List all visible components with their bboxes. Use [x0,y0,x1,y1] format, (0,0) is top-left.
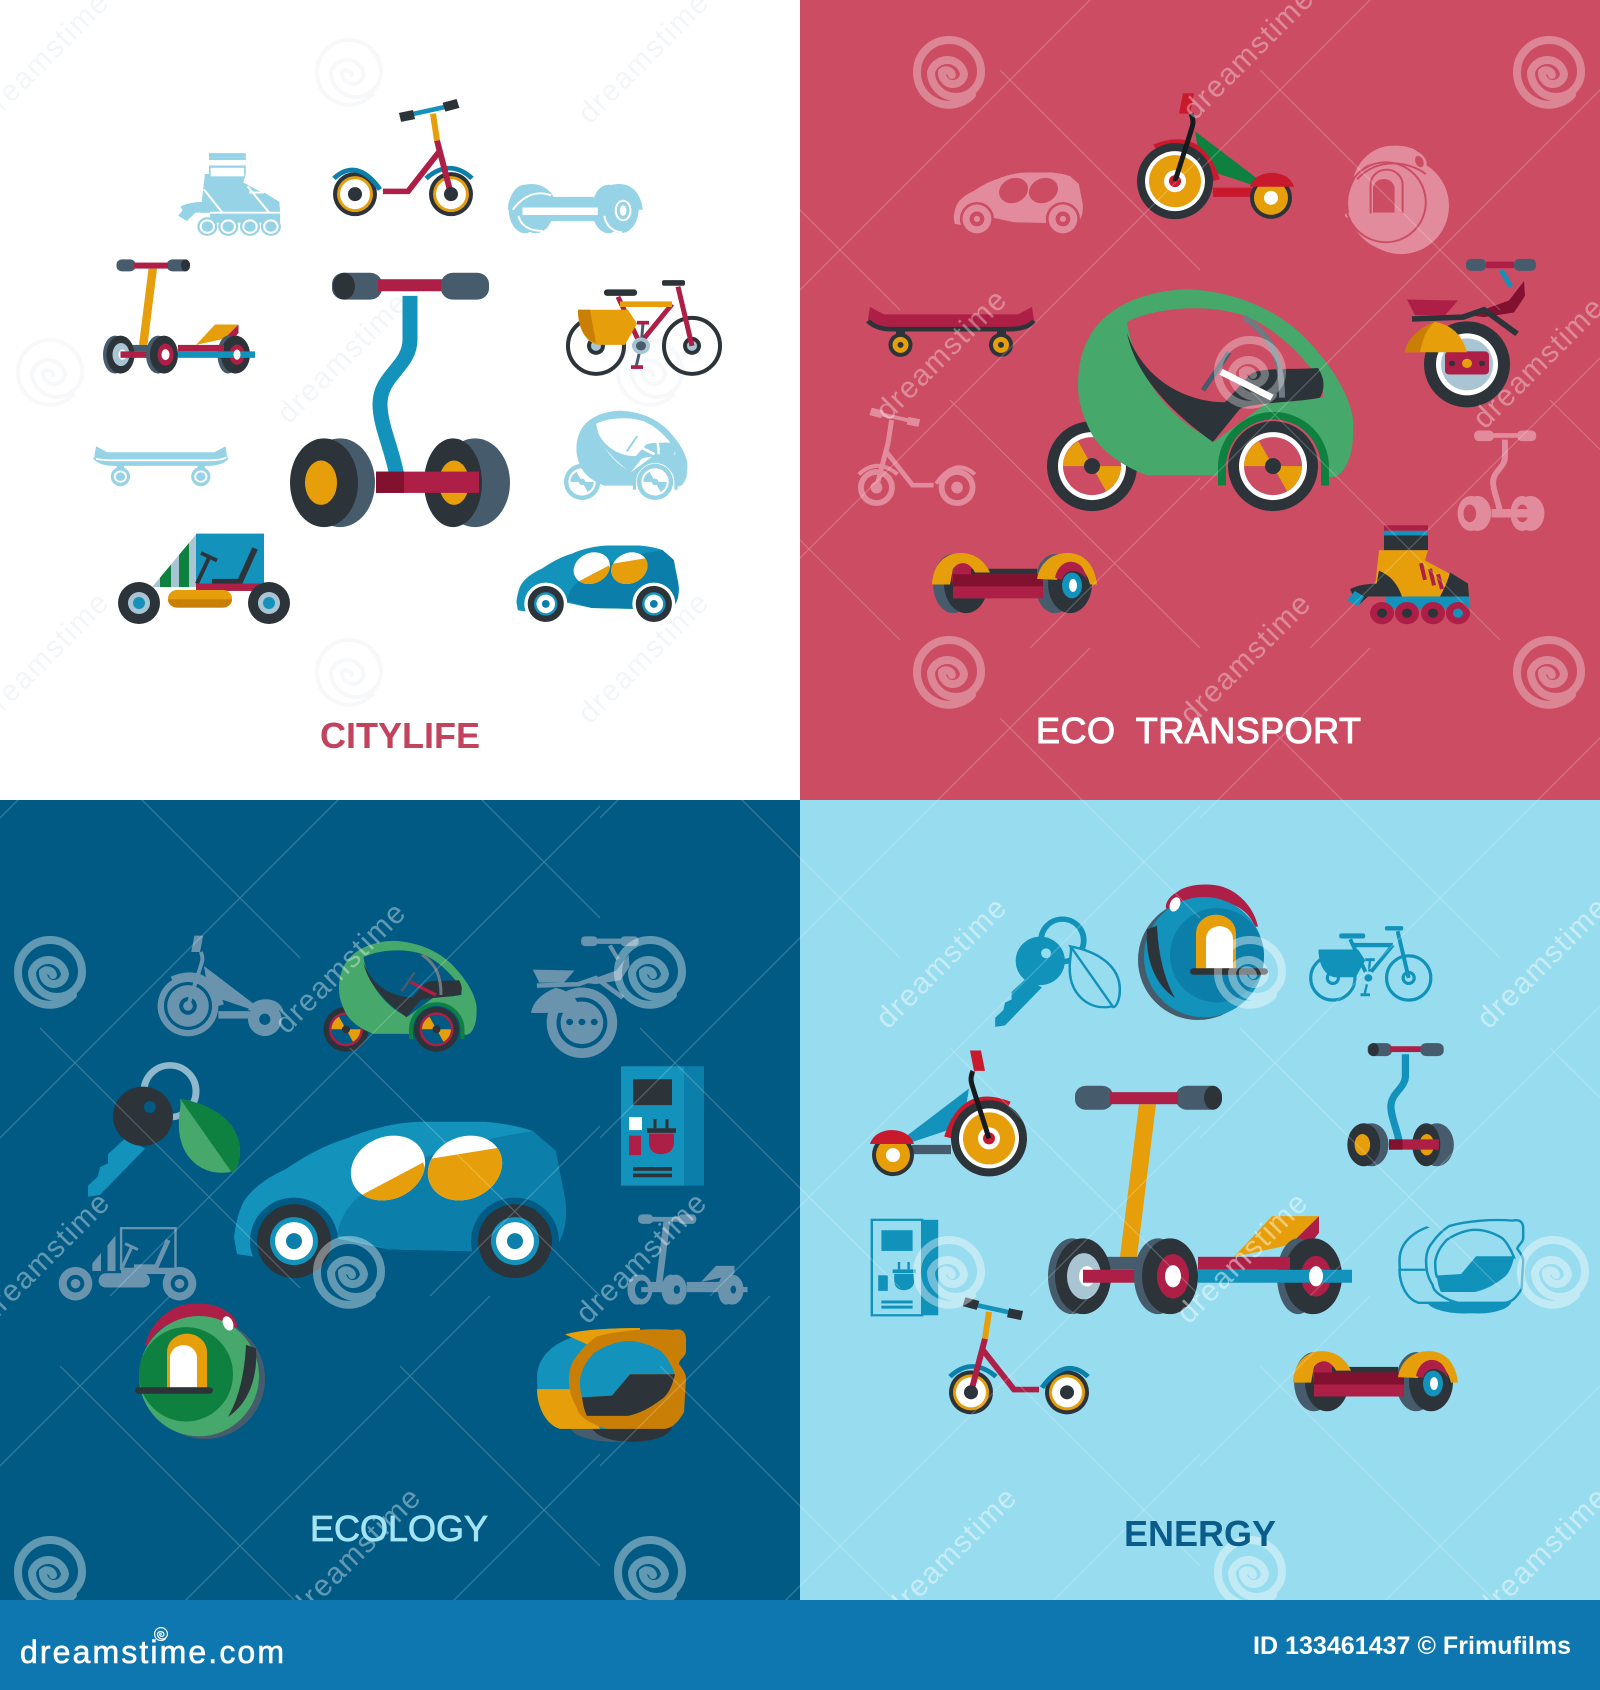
icon group: ecology vehicles [59,936,748,1442]
title: ecology: ECOLOGY [310,1508,488,1549]
watermark: citylife panel [0,0,715,730]
footer credit: ID 133461437 © Frimufilms [1253,1632,1571,1660]
icon: kick scooter [333,103,473,216]
icon: bubble car large [1047,289,1353,516]
icon: charging station [621,1066,704,1186]
panel: energy [800,800,1600,1625]
footer bar [0,1600,1600,1690]
icon: small electric car [516,546,679,625]
watermark: ecology panel [0,800,800,1625]
icon: moto wheel [1405,259,1536,407]
icon: bubble car small [324,941,477,1054]
icon: capsule helmet [537,1328,686,1442]
icon: monowheel blue [1138,884,1268,1020]
icon: moto wheel silhouette [531,936,639,1058]
icon: roller skate outline [178,153,281,236]
panel: ecology [0,800,800,1625]
watermark: ecology panel: dreamstime [570,1187,713,1330]
footer logo: dreamstime.com: dreamstime.com [20,1634,284,1670]
icon: three-wheel scooter large [1048,1086,1352,1314]
watermark: citylife panel: dreamstime [572,587,715,730]
title: citylife: CITYLIFE [320,715,480,756]
title: eco transport: ECO TRANSPORT [1036,710,1361,751]
icon: skateboard outline [94,446,227,486]
icon: capsule outline [1400,1219,1523,1313]
icon: skateboard [868,307,1034,357]
watermark: energy panel: dreamstime [1171,1187,1314,1330]
icon: three-wheel scooter silhouette [627,1214,748,1305]
icon: segway small [1347,1043,1454,1166]
icon: segway large [290,273,510,527]
icon: bubble car outline [564,411,687,502]
icon: electric car large [234,1122,566,1285]
watermark: citylife panel: dreamstime [271,287,414,430]
panel: eco transport [800,0,1600,800]
watermark: energy panel [800,800,1600,1625]
panel: citylife [0,0,722,748]
icon: go-cart silhouette [59,1227,196,1300]
icon: monowheel green [135,1304,265,1439]
watermark: eco transport panel: dreamstime [1174,588,1317,731]
icon: tricycle silhouette [158,936,283,1036]
title: energy: ENERGY [1124,1513,1276,1554]
watermark: energy panel: dreamstime [870,892,1013,1035]
icon: segway silhouette [1458,431,1544,531]
icon: cargo bicycle [568,280,720,374]
icon: key outline [995,919,1120,1027]
watermark: ecology panel: dreamstime [284,1482,427,1625]
icon group: eco transport vehicles [858,93,1544,624]
icon: hoverboard outline [508,184,643,233]
icon: kick scooter silhouette [858,411,976,506]
icon: three-wheel scooter [103,259,255,374]
icon: tricycle [1137,93,1294,219]
icon: tricycle blue [870,1051,1027,1176]
watermark: eco transport panel: dreamstime [870,284,1013,427]
icon: hoverboard [1293,1351,1458,1411]
icon: key with leaf [88,1065,240,1197]
watermark: energy panel: dreamstime [880,1482,1023,1625]
icon group: energy vehicles [870,884,1523,1414]
icon: hoverboard [932,553,1097,613]
watermark: ecology panel: dreamstime [269,897,412,1040]
icon: go-cart [118,532,290,624]
watermark: eco transport panel [800,0,1600,800]
icon: car silhouette [954,173,1083,236]
icon: bicycle silhouette [1311,926,1431,1000]
icon: monowheel silhouette [1345,146,1449,254]
icon: kick scooter [949,1302,1089,1414]
icon: roller skate [1347,525,1470,624]
icon group: citylife vehicles [94,103,720,625]
icon: charging station outline [872,1220,938,1315]
